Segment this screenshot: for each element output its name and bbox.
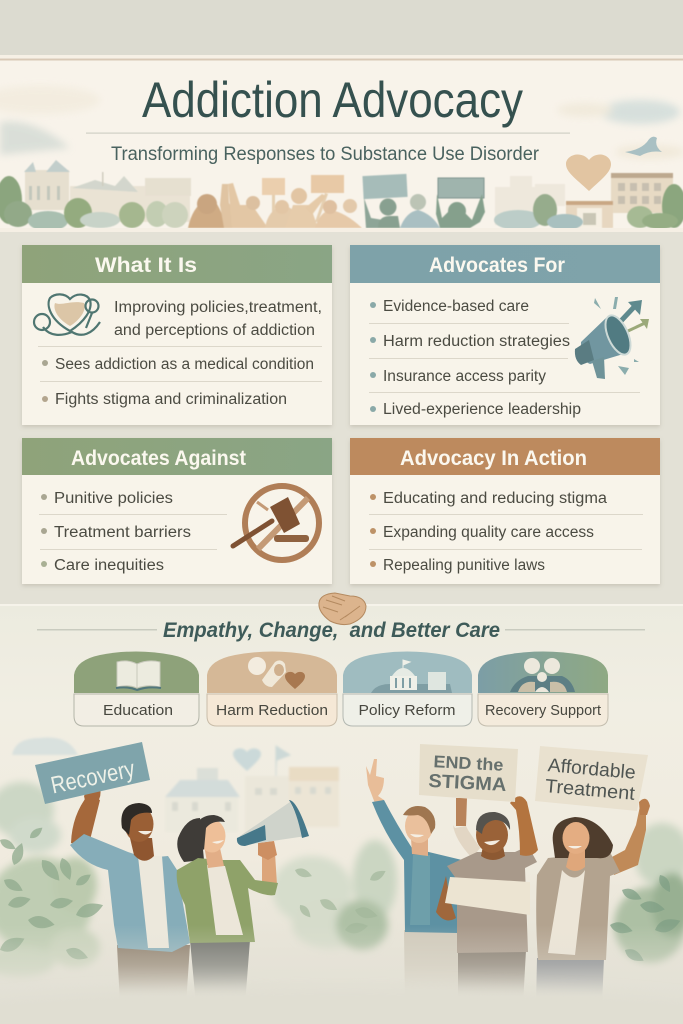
icon: megaphone with arrows bbox=[575, 297, 649, 379]
illustration: bird bbox=[625, 137, 662, 156]
label: Harm Reduction bbox=[216, 702, 328, 719]
illustration: heart bbox=[566, 154, 611, 191]
sign: end the stigma bbox=[419, 744, 518, 802]
panel: advocates for bbox=[350, 245, 660, 425]
icon: capitol building bbox=[371, 660, 452, 693]
card: policy reform bbox=[343, 652, 472, 726]
panel: what it is: and perceptions of addiction bbox=[114, 322, 315, 339]
heading: advocates for: Advocates For bbox=[429, 254, 565, 277]
text: intro: Improving policies,treatment, bbox=[114, 299, 322, 316]
bullet: barriers: Treatment barriers bbox=[54, 524, 191, 541]
heading: advocacy in action: Advocacy In Action bbox=[400, 447, 587, 470]
bullet: medical condition: Sees addiction as a medical condition bbox=[55, 356, 314, 373]
sign: end the stigma: END the bbox=[433, 752, 504, 775]
top background band bbox=[0, 0, 683, 55]
bullet: lived experience: Lived-experience leadership bbox=[383, 401, 581, 418]
panel: advocates against bbox=[22, 438, 332, 584]
icon: clasped hands bbox=[319, 593, 366, 625]
title divider bbox=[86, 132, 570, 134]
sign: recovery: Recovery bbox=[49, 755, 137, 800]
bullet: inequities: Care inequities bbox=[54, 557, 164, 574]
scene: middle foliage bbox=[272, 840, 397, 950]
card: education bbox=[74, 652, 199, 726]
card: recovery support bbox=[478, 652, 608, 726]
bullet: evidence: Evidence-based care bbox=[383, 298, 529, 315]
label: Policy Reform bbox=[358, 702, 456, 719]
lower section background bbox=[0, 604, 683, 1024]
icon: support group bbox=[510, 658, 575, 692]
sign: end the stigma: STIGMA bbox=[428, 771, 507, 796]
illustration: right buildings bbox=[495, 173, 673, 228]
panel: what it is bbox=[22, 245, 332, 425]
label: Recovery Support bbox=[485, 702, 602, 719]
bullet: educating: Educating and reducing stigma bbox=[383, 490, 607, 507]
sign: affordable treatment bbox=[535, 746, 648, 811]
scene: bottom fog bbox=[0, 925, 683, 1024]
icon: prohibited gavel bbox=[233, 486, 319, 560]
label: Education bbox=[103, 702, 173, 719]
illustration: left buildings bbox=[24, 160, 191, 222]
illustration: left trees bbox=[0, 176, 188, 231]
scene: background town bbox=[12, 738, 339, 836]
icon: pills and heart bbox=[248, 657, 305, 689]
person: woman with sign bbox=[536, 799, 650, 1005]
icon: heart stethoscope bbox=[34, 294, 100, 335]
panel: advocacy in action bbox=[350, 438, 660, 584]
heading: advocates against: Advocates Against bbox=[71, 447, 246, 470]
middle background bbox=[0, 232, 683, 604]
bullet: punitive: Punitive policies bbox=[54, 490, 173, 507]
subtitle: Transforming Responses to Substance Use Disorder bbox=[111, 144, 540, 165]
scene: right foliage bbox=[609, 823, 683, 965]
header panel bbox=[0, 55, 683, 232]
person: man with recovery sign bbox=[70, 787, 190, 1005]
slogan: Empathy, Change, and Better Care bbox=[163, 619, 500, 642]
heading: what it is: What It Is bbox=[95, 254, 197, 277]
person: man waving bbox=[366, 759, 462, 1005]
bullet: insurance: Insurance access parity bbox=[383, 368, 546, 385]
illustration: right trees bbox=[494, 184, 683, 230]
icon: open book bbox=[116, 661, 161, 690]
slogan rule lines bbox=[37, 629, 645, 630]
bullet: repealing: Repealing punitive laws bbox=[383, 557, 545, 574]
megaphone bbox=[239, 802, 306, 845]
title: Addiction Advocacy bbox=[142, 72, 523, 128]
bullet: expanding: Expanding quality care access bbox=[383, 524, 594, 541]
card: harm reduction bbox=[207, 652, 337, 726]
bullet: harm reduction: Harm reduction strategies bbox=[383, 333, 570, 350]
illustration: crowd silhouettes bbox=[188, 174, 485, 228]
scene: left foliage bbox=[0, 782, 105, 978]
person: man with banner bbox=[436, 796, 538, 1005]
bullet: stigma: Fights stigma and criminalization bbox=[55, 391, 287, 408]
sign: recovery bbox=[35, 742, 150, 804]
sign: affordable treatment: Affordable bbox=[547, 755, 636, 784]
person: woman with megaphone bbox=[177, 800, 309, 1005]
header washes and clouds bbox=[0, 86, 683, 159]
sign: affordable treatment: Treatment bbox=[544, 776, 636, 805]
